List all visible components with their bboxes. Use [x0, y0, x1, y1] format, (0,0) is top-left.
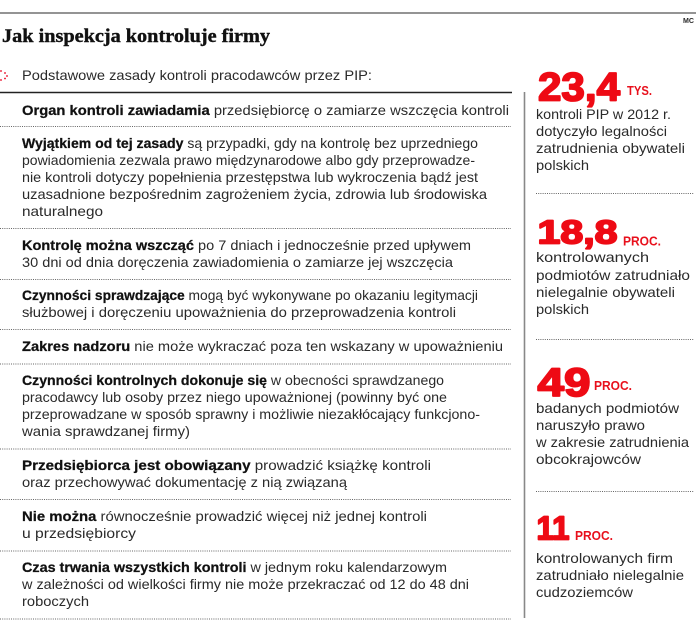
rule 2: naturalnego [22, 203, 103, 219]
stat: 18,8 proc.: PROC. [623, 234, 661, 248]
intro line: Podstawowe zasady kontroli pracodawców przez PIP: [22, 67, 372, 83]
stat: 11 proc.: 11 [536, 510, 570, 546]
rule 5: Zakres nadzoru nie może wykraczać poza ten wskazany w upoważnieniu [22, 338, 503, 354]
stat: 49 proc. [535, 361, 694, 492]
stat: 18,8 proc.: kontrolowanych [536, 249, 649, 265]
rule 9 [0, 559, 511, 619]
rule 3: Kontrolę można wszcząć po 7 dniach i jednocześnie przed upływem [22, 237, 471, 253]
rule 6: przeprowadzane w sposób sprawny i możliwie niezakłócający funkcjono- [22, 406, 480, 422]
rule 6: Czynności kontrolnych dokonuje się w obecności sprawdzanego [22, 372, 444, 388]
stat: 11 proc.: cudzoziemców [536, 584, 634, 600]
rule 2: nie kontroli dotyczy popełnienia przestępstwa lub wykroczenia bądź jest [22, 169, 478, 185]
rule 6 [0, 372, 511, 449]
rule 6: pracodawcy lub osoby przez niego upoważnionej (powinny być one [22, 389, 447, 405]
rule 3 [0, 237, 511, 280]
rule 2: uzasadnione bezpośrednim zagrożeniem życia, zdrowia lub środowiska [22, 186, 487, 202]
rule 2: Wyjątkiem od tej zasady są przypadki, gdy na kontrolę bez uprzedniego [22, 135, 478, 151]
stat: 11 proc. [536, 510, 684, 600]
stat: 23,4 tys.: 23,4 [538, 66, 621, 110]
rule 9: w zależności od wielkości firmy nie może przekraczać od 12 do 48 dni [21, 576, 469, 592]
stat: 11 proc.: kontrolowanych firm [536, 550, 673, 566]
stat: 23,4 tys.: TYS. [627, 84, 652, 98]
rule 8 [0, 508, 511, 551]
stat: 49 proc.: naruszyło prawo [536, 417, 645, 433]
rule 2: powiadomienia zezwala prawo międzynarodowe albo gdy przeprowadze- [22, 152, 475, 168]
stat: 23,4 tys.: polskich [536, 157, 589, 173]
stat: 49 proc.: obcokrajowców [536, 451, 642, 467]
stat: 18,8 proc.: nielegalnie obywateli [536, 284, 675, 300]
stat: 18,8 proc.: 18,8 [538, 214, 618, 250]
rule 4: Czynności sprawdzające mogą być wykonywane po okazaniu legitymacji [22, 287, 478, 303]
stat: 23,4 tys.: dotyczyło legalności [536, 123, 667, 139]
stat: 49 proc.: w zakresie zatrudnienia [535, 434, 689, 450]
rule 7: Przedsiębiorca jest obowiązany prowadzić książkę kontroli [22, 457, 431, 473]
rule 1: Organ kontroli zawiadamia przedsiębiorcę o zamiarze wszczęcia kontroli [22, 102, 509, 118]
rule 9: Czas trwania wszystkich kontroli w jednym roku kalendarzowym [22, 559, 447, 575]
stat: 11 proc.: zatrudniało nielegalnie [536, 567, 684, 583]
rule 4: służbowej i doręczeniu upoważnienia do przeprowadzenia kontroli [22, 304, 456, 320]
rule 2 [0, 135, 511, 228]
rule 9: roboczych [22, 593, 89, 609]
rule 8: Nie można równocześnie prowadzić więcej niż jednej kontroli [22, 508, 427, 524]
rule 6: wania sprawdzanej firmy) [21, 423, 190, 439]
rule 8: u przedsiębiorcy [22, 525, 136, 541]
stat: 18,8 proc. [536, 214, 694, 340]
stat: 18,8 proc.: polskich [536, 301, 589, 317]
stat: 18,8 proc.: podmiotów zatrudniało [536, 267, 690, 283]
rule 4 [0, 287, 511, 330]
stat: 23,4 tys.: kontroli PIP w 2012 r. [536, 106, 671, 122]
credit: MC: MC [683, 16, 695, 25]
stat: 23,4 tys.: zatrudnienia obywateli [536, 140, 685, 156]
title: Jak inspekcja kontroluje firmy [2, 26, 271, 47]
stat: 23,4 tys. [536, 66, 694, 194]
icon: red dotted marker [0, 70, 8, 81]
stat: 49 proc.: PROC. [594, 379, 632, 393]
rule 7: oraz przechowywać dokumentację z nią związaną [22, 474, 347, 490]
stat: 11 proc.: PROC. [575, 529, 613, 543]
stat: 49 proc.: 49 [538, 361, 590, 405]
rule 3: 30 dni od dnia doręczenia zawiadomienia o zamiarze jej wszczęcia [22, 254, 453, 270]
stat: 49 proc.: badanych podmiotów [536, 400, 680, 416]
rule 7 [0, 457, 511, 500]
